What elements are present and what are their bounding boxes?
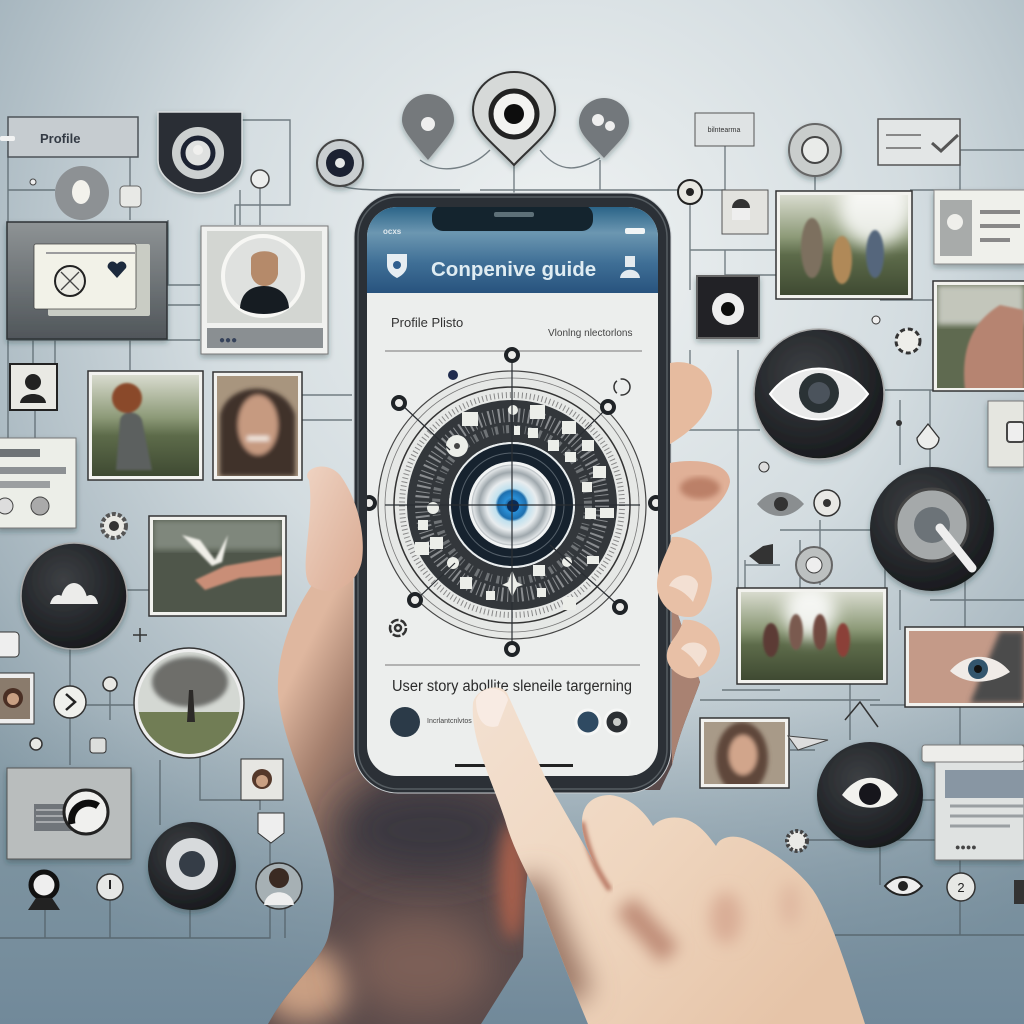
top camera icon — [317, 140, 363, 186]
label: Profile — [0, 117, 138, 157]
large eye badge — [754, 329, 884, 459]
label: Profile: Profile — [40, 131, 80, 146]
small swirl icons — [390, 379, 630, 636]
label box top: bilntearma — [708, 127, 740, 134]
flower icon — [872, 316, 920, 353]
bottom controls: Incrlantcnlvtos — [427, 718, 472, 725]
node + lock tile — [678, 180, 768, 234]
card top right — [934, 190, 1024, 264]
photo: woman in field — [88, 371, 203, 480]
small left icons — [0, 628, 147, 657]
arrow button — [54, 686, 86, 718]
check box — [878, 119, 960, 165]
round badge top right — [789, 124, 841, 176]
thumb over phone left — [306, 466, 363, 591]
gear icon — [102, 514, 126, 538]
pointing hand — [460, 680, 880, 1024]
round person badge — [21, 543, 127, 649]
photo: eye close-up — [905, 627, 1024, 707]
map pin small right — [579, 98, 629, 158]
photo: hand and butterfly — [149, 516, 286, 616]
connector network — [0, 120, 1024, 938]
small eye row — [757, 490, 840, 516]
list card left — [0, 438, 76, 528]
small nodes — [30, 677, 117, 753]
photo: small portrait — [0, 673, 34, 724]
webcam + clock icons — [28, 872, 123, 910]
map pin centre — [473, 72, 555, 165]
thumb icon + gear — [749, 544, 832, 583]
radial lens graphic — [363, 349, 662, 655]
photo: blurred woman — [700, 718, 789, 794]
eye tile — [697, 276, 759, 338]
tile right — [988, 401, 1024, 467]
round portrait — [256, 863, 302, 909]
circular tree photo — [130, 648, 250, 762]
photo: children in field — [775, 190, 913, 300]
label box top — [695, 113, 754, 146]
bottom right icons — [787, 831, 1024, 904]
screen labels: Vlonlng nlectorlons — [548, 328, 632, 339]
fingers right of phone — [657, 362, 730, 678]
user icon box — [10, 364, 57, 410]
eye badge bottom right — [817, 742, 923, 848]
photo: hands — [933, 281, 1024, 391]
phone — [354, 193, 671, 793]
screen background — [367, 207, 658, 779]
shield icon — [158, 112, 242, 193]
round eye lens bottom left — [148, 822, 236, 910]
back hand behind the phone — [268, 578, 700, 1024]
bottom right icons: 2 — [957, 880, 965, 895]
app header — [367, 205, 658, 293]
card with camera — [7, 768, 131, 859]
map pin small left — [402, 94, 454, 160]
lens dial badge — [870, 467, 994, 591]
app header: Conpenive guide — [431, 258, 596, 281]
app header: ocxs — [383, 227, 402, 236]
profile portrait card — [201, 226, 328, 354]
bottom controls — [390, 707, 629, 767]
screen labels — [385, 315, 642, 351]
user story text: User story abollite sleneile targerning — [392, 678, 632, 695]
card panel left — [7, 222, 167, 339]
small nodes top left — [30, 166, 269, 220]
document card bottom right — [922, 745, 1024, 860]
small portrait card — [241, 759, 284, 843]
screen labels: Profile Plisto — [391, 315, 463, 330]
document card bottom right: ●●●● — [955, 842, 977, 852]
profile portrait card: ●●● — [219, 335, 237, 346]
photo: blurred face — [213, 372, 302, 480]
plane icon — [788, 702, 878, 750]
photo: group sunrise — [737, 586, 887, 684]
drop icon — [759, 420, 939, 472]
